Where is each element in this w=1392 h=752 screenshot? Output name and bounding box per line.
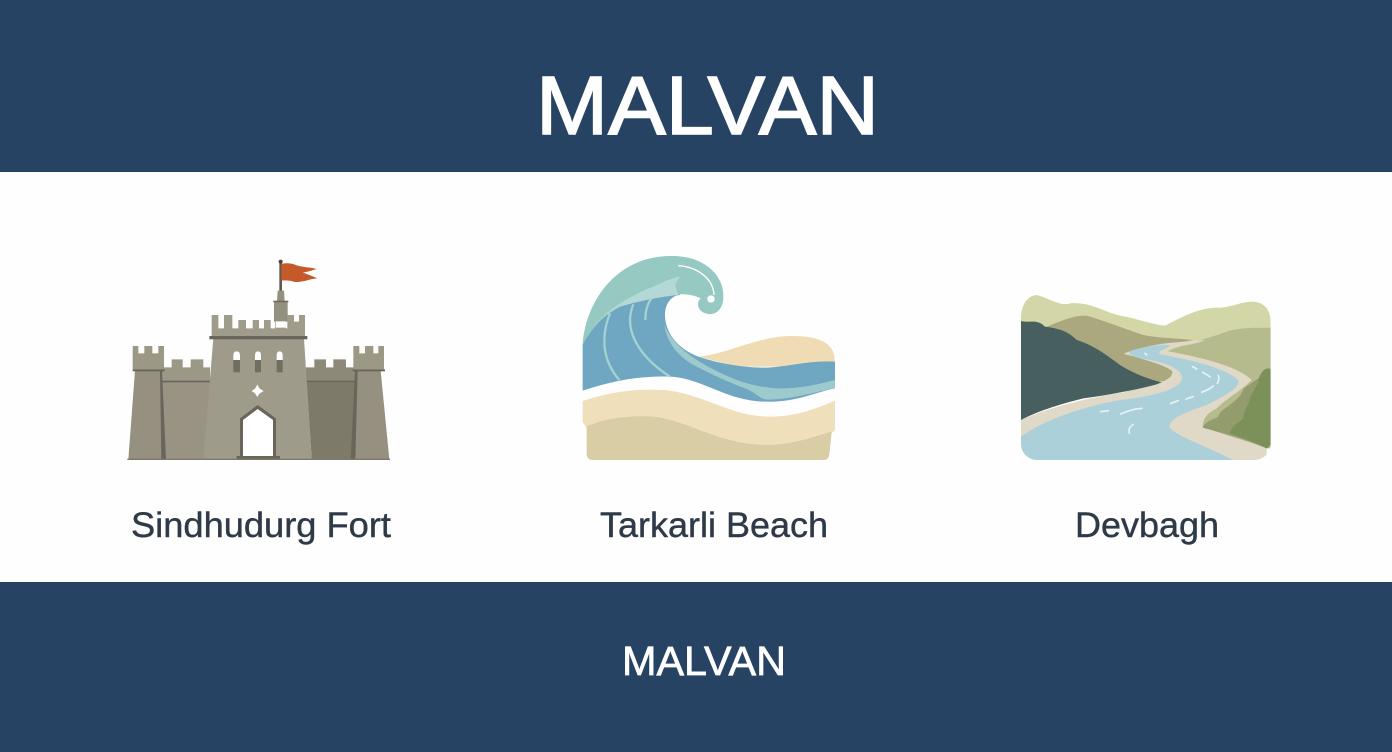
icon: Sindhudurg Fort castle xyxy=(127,260,390,460)
left wall xyxy=(161,359,211,459)
back mountains xyxy=(1021,295,1271,392)
wave body xyxy=(583,288,835,402)
upper sand xyxy=(583,390,835,452)
flag and spire xyxy=(273,260,317,322)
icon: Devbagh river landscape xyxy=(1021,295,1271,460)
dark forest xyxy=(1021,321,1163,420)
wave light strip xyxy=(664,325,835,400)
right green hill xyxy=(1203,370,1271,448)
back sand xyxy=(698,336,835,367)
windows xyxy=(233,351,283,372)
right wall xyxy=(306,359,356,459)
water ripples xyxy=(1101,353,1219,433)
label: Devbagh: Devbagh xyxy=(1075,506,1219,545)
curl dot xyxy=(707,295,715,303)
right mid hills xyxy=(1167,328,1271,448)
footer band xyxy=(0,582,1392,752)
gate xyxy=(237,405,280,460)
left tower xyxy=(128,346,166,459)
front green hill xyxy=(1230,368,1271,448)
river water xyxy=(1021,345,1238,460)
central keep xyxy=(203,315,312,459)
footer label: MALVAN xyxy=(622,638,786,684)
header band xyxy=(0,0,1392,172)
title: MALVAN xyxy=(536,59,879,152)
icon: Tarkarli Beach wave xyxy=(583,256,835,460)
brown hill xyxy=(1047,316,1193,388)
crest highlight xyxy=(585,277,680,337)
lower sand xyxy=(587,416,832,460)
star ornament xyxy=(252,385,264,397)
label: Tarkarli Beach: Tarkarli Beach xyxy=(600,506,828,545)
wave crest xyxy=(583,256,723,345)
right tower xyxy=(351,346,389,459)
foam lines xyxy=(604,266,714,380)
river banks xyxy=(1021,340,1267,460)
label: Sindhudurg Fort: Sindhudurg Fort xyxy=(131,506,391,545)
